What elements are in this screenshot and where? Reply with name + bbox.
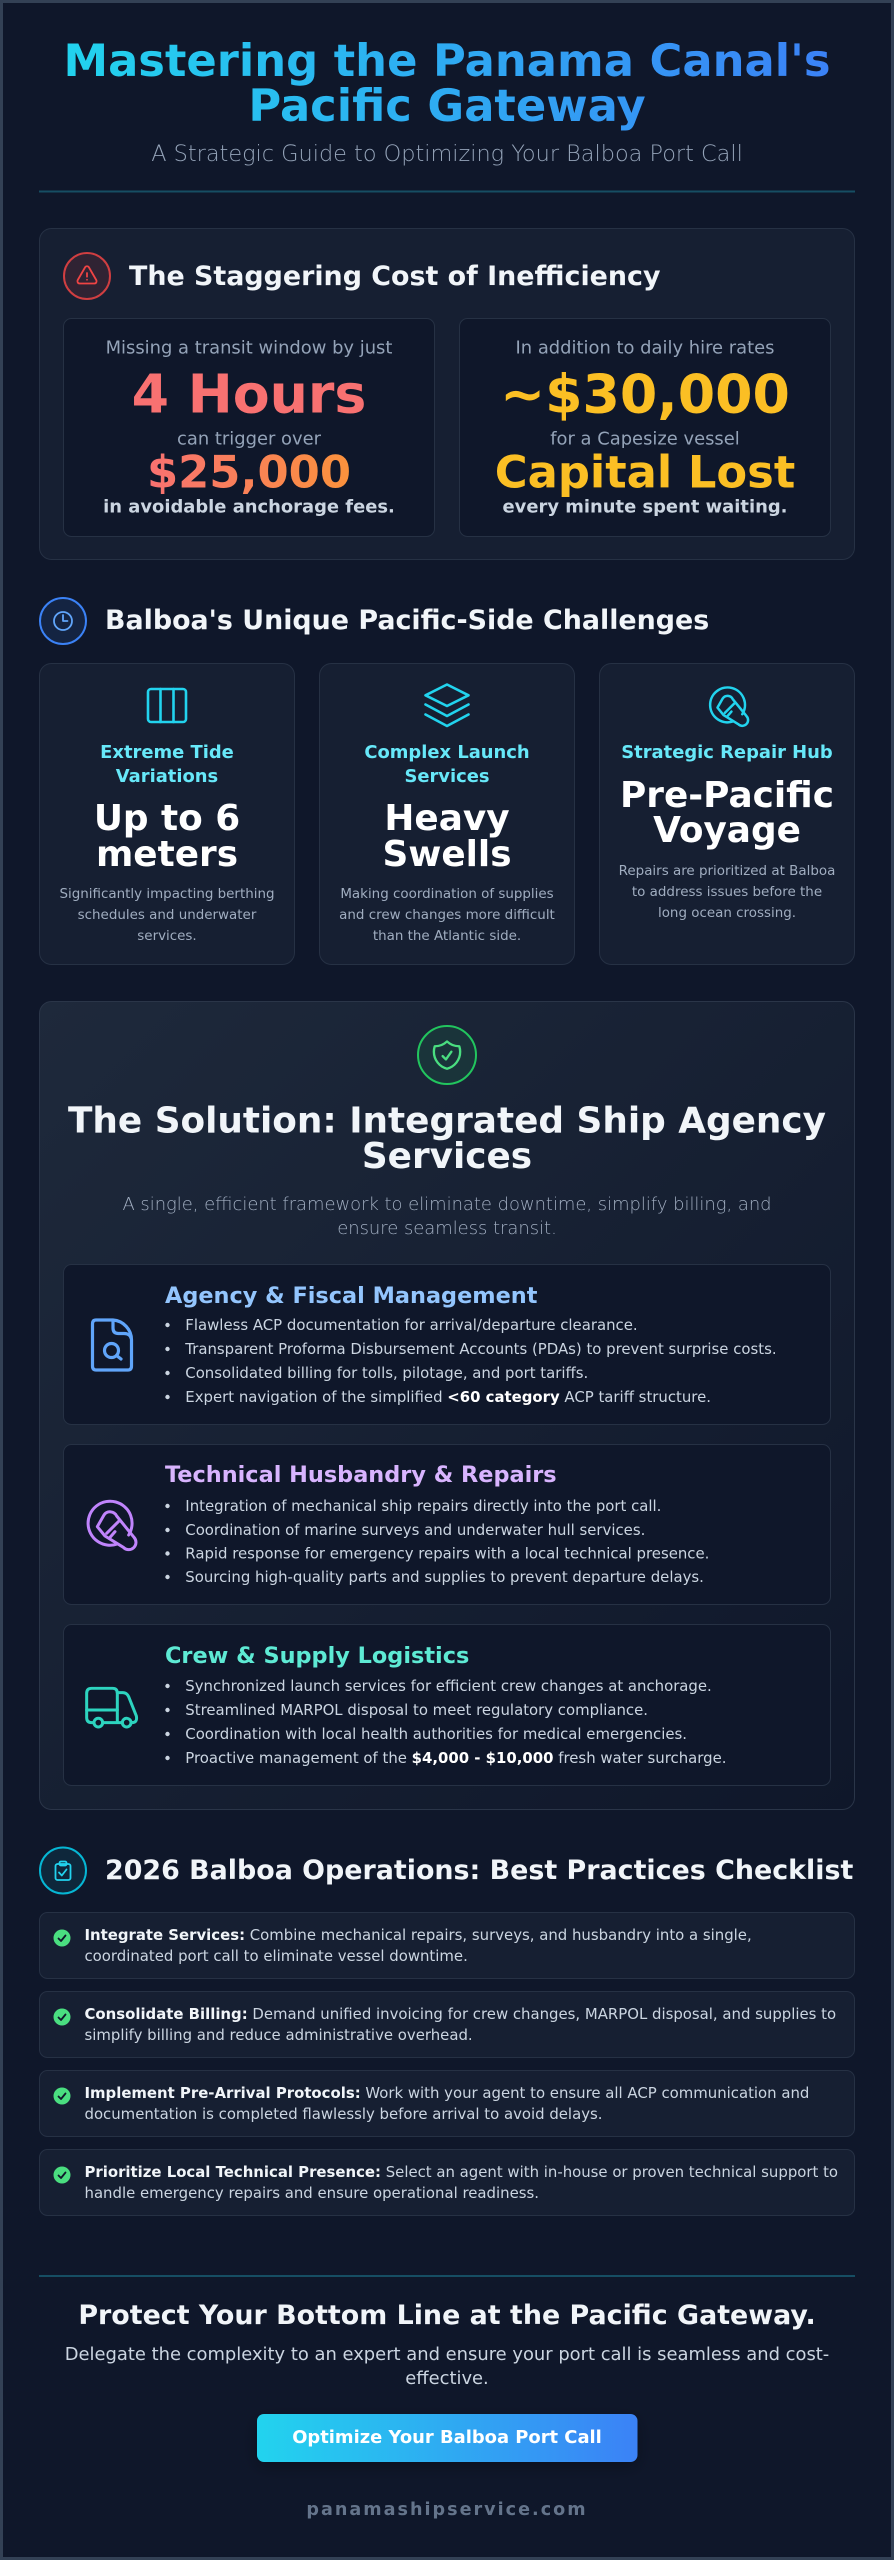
heading: The Staggering Cost of Inefficiency xyxy=(129,261,661,292)
title: Pacific Gateway xyxy=(248,79,646,132)
heading: Services xyxy=(362,1136,532,1177)
panel: extreme tide: meters xyxy=(96,834,238,875)
service card: agency: Flawless ACP documentation for arrival/departure clearance. xyxy=(185,1316,638,1334)
icon: wrench xyxy=(710,687,748,726)
service card: agency: Expert navigation of the simplified <60 category ACP tariff structure. xyxy=(185,1388,711,1406)
service card: crew xyxy=(64,1624,830,1786)
checklist item: protocols: documentation is completed flawlessly before arrival to avoid delays. xyxy=(84,2105,602,2123)
checklist item: presence: handle emergency repairs and ensure operational readiness. xyxy=(84,2184,539,2202)
icon: clock xyxy=(40,598,86,644)
checklist item: protocols xyxy=(40,2070,854,2136)
stat card: missed window: can trigger over xyxy=(177,428,322,450)
checklist item: integrate xyxy=(40,1912,854,1978)
panel: repair hub: Pre-Pacific xyxy=(620,775,834,816)
icon: layers xyxy=(426,684,468,726)
icon: check xyxy=(54,2166,70,2184)
checklist item: billing: Consolidate Billing: Demand unified invoicing for crew changes, MARPOL disposal, and supplies to xyxy=(84,2005,836,2023)
service card: crew: Proactive management of the $4,000 - $10,000 fresh water surcharge. xyxy=(185,1749,726,1767)
icon: check xyxy=(54,2008,70,2026)
section heading: checklist: 2026 Balboa Operations: Best Practices Checklist xyxy=(105,1855,853,1886)
website: panamashipservice.com xyxy=(306,2500,588,2520)
panel: extreme tide xyxy=(40,664,294,964)
checklist item: presence xyxy=(40,2150,854,2216)
stat card: hire cost: In addition to daily hire rates xyxy=(516,338,774,358)
icon: columns xyxy=(148,689,186,722)
panel: launch services: Heavy xyxy=(384,798,510,839)
service card: technical: Sourcing high-quality parts and supplies to prevent departure delays. xyxy=(185,1568,704,1586)
panel: extreme tide: Variations xyxy=(116,766,218,787)
panel: repair hub: long ocean crossing. xyxy=(658,906,796,921)
service card: technical: Technical Husbandry & Repairs xyxy=(165,1462,557,1488)
service card: technical: Coordination of marine surveys and underwater hull services. xyxy=(185,1521,645,1539)
service card: crew: Synchronized launch services for efficient crew changes at anchorage. xyxy=(185,1677,712,1695)
stat card: hire cost: for a Capesize vessel xyxy=(550,428,740,450)
panel: launch services: Swells xyxy=(382,834,512,875)
icon: check xyxy=(54,2088,70,2104)
panel: extreme tide: services. xyxy=(137,929,197,944)
panel: extreme tide: Extreme Tide xyxy=(100,742,234,763)
icon: clipboard xyxy=(40,1848,86,1894)
service card: agency: Agency & Fiscal Management xyxy=(165,1283,538,1309)
stat card: missed window: Missing a transit window by just xyxy=(106,338,392,358)
section heading: challenges xyxy=(40,598,709,644)
subtitle: A Strategic Guide to Optimizing Your Balboa Port Call xyxy=(151,141,743,167)
stat card: missed window: in avoidable anchorage fees. xyxy=(103,496,395,518)
checklist item: billing: simplify billing and reduce administrative overhead. xyxy=(84,2026,473,2044)
header xyxy=(64,34,830,167)
panel: repair hub: Strategic Repair Hub xyxy=(621,742,833,763)
stat card: hire cost xyxy=(460,318,830,536)
panel: extreme tide: Significantly impacting berthing xyxy=(59,887,275,902)
checklist item: billing xyxy=(40,1992,854,2058)
icon: warning triangle xyxy=(64,253,110,299)
closing text: effective. xyxy=(405,2368,489,2389)
icon: check xyxy=(54,1930,70,1946)
panel: repair hub xyxy=(600,664,854,964)
panel: extreme tide: Up to 6 xyxy=(94,798,240,839)
panel: the solution xyxy=(40,1002,854,1810)
service card: technical: Rapid response for emergency repairs with a local technical presence. xyxy=(185,1544,709,1562)
stat: 25,000: $25,000 xyxy=(147,446,351,498)
title xyxy=(64,34,830,132)
panel: extreme tide: schedules and underwater xyxy=(78,908,257,923)
stat: 30,000: ~$30,000 xyxy=(500,362,790,426)
icon: shield xyxy=(418,1026,476,1084)
service card: agency xyxy=(64,1264,830,1424)
checklist item: protocols: Implement Pre-Arrival Protocols: Work with your agent to ensure all ACP communication and xyxy=(84,2084,809,2102)
intro: A single, efficient framework to eliminate downtime, simplify billing, and xyxy=(122,1194,772,1215)
panel: launch services: Making coordination of supplies xyxy=(340,887,554,902)
panel: cost of inefficiency xyxy=(40,228,854,560)
closing text: Delegate the complexity to an expert and ensure your port call is seamless and cost- xyxy=(65,2344,829,2365)
stat: 4 hours: 4 Hours xyxy=(132,362,366,426)
panel: repair hub: Repairs are prioritized at Balboa xyxy=(619,864,835,879)
panel: launch services: Complex Launch xyxy=(364,742,530,763)
heading xyxy=(68,1100,826,1177)
icon: document search xyxy=(92,1320,132,1370)
service card: crew: Coordination with local health authorities for medical emergencies. xyxy=(185,1725,687,1743)
panel: repair hub: Voyage xyxy=(653,810,801,851)
title: Mastering the Panama Canal's xyxy=(64,34,830,87)
checklist item: integrate: coordinated port call to eliminate vessel downtime. xyxy=(84,1947,468,1965)
stat: capital lost: Capital Lost xyxy=(495,446,795,498)
panel: launch services: and crew changes more difficult xyxy=(339,908,555,923)
panel: repair hub: to address issues before the xyxy=(632,885,822,900)
footer call to action xyxy=(65,2300,829,2520)
intro xyxy=(122,1194,772,1239)
service card: technical: Integration of mechanical ship repairs directly into the port call. xyxy=(185,1497,661,1515)
panel: launch services: Services xyxy=(404,766,490,787)
icon: wrench xyxy=(88,1501,136,1550)
service card: agency: Transparent Proforma Disbursement Accounts (PDAs) to prevent surprise costs. xyxy=(184,1340,777,1358)
stat card: hire cost: every minute spent waiting. xyxy=(503,496,787,518)
stat card: missed window xyxy=(64,318,434,536)
service card: crew: Crew & Supply Logistics xyxy=(165,1643,469,1669)
heading: The Solution: Integrated Ship Agency xyxy=(68,1100,826,1142)
service card: crew: Streamlined MARPOL disposal to meet regulatory compliance. xyxy=(185,1701,648,1719)
closing text xyxy=(65,2344,829,2389)
service card: technical xyxy=(64,1444,830,1604)
button xyxy=(257,2414,638,2466)
button: Optimize Your Balboa Port Call xyxy=(292,2427,602,2448)
panel: launch services: than the Atlantic side. xyxy=(373,929,521,944)
closing heading: Protect Your Bottom Line at the Pacific Gateway. xyxy=(78,2300,816,2331)
icon: truck xyxy=(87,1688,137,1727)
section heading: checklist xyxy=(40,1848,853,1894)
panel: launch services xyxy=(320,664,574,964)
intro: ensure seamless transit. xyxy=(337,1218,557,1239)
checklist item: integrate: Integrate Services: Combine mechanical repairs, surveys, and husbandry into a single, xyxy=(84,1926,752,1944)
checklist item: presence: Prioritize Local Technical Presence: Select an agent with in-house or proven technical support to xyxy=(84,2163,838,2181)
section heading: challenges: Balboa's Unique Pacific-Side Challenges xyxy=(105,605,709,636)
service card: agency: Consolidated billing for tolls, pilotage, and port tariffs. xyxy=(185,1364,588,1382)
